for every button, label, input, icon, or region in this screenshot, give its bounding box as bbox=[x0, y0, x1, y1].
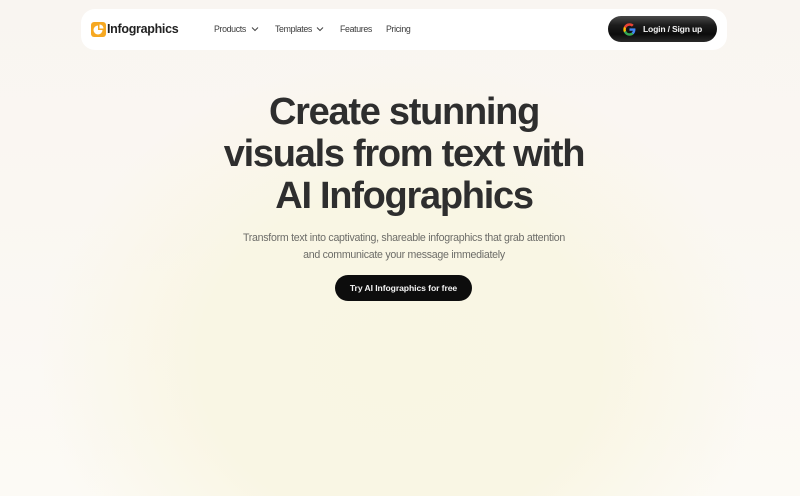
navigation bar bbox=[81, 9, 727, 50]
logo wordmark: Infographics bbox=[107, 22, 178, 36]
button label: Login / Sign up bbox=[643, 24, 702, 34]
call to action button bbox=[335, 275, 472, 301]
hero heading: Create stunning bbox=[269, 91, 539, 133]
nav link: features: Features bbox=[340, 24, 372, 34]
hero heading: visuals from text with bbox=[224, 133, 584, 175]
nav link: pricing: Pricing bbox=[386, 24, 410, 34]
icon: logo bbox=[91, 22, 106, 37]
nav panel bbox=[81, 9, 727, 50]
subtitle line 2: and communicate your message immediately bbox=[303, 249, 505, 261]
icon: chevron products bbox=[252, 27, 258, 32]
icon: chevron templates bbox=[316, 27, 324, 32]
hero subtitle bbox=[243, 232, 565, 261]
subtitle line 1: Transform text into captivating, shareable infographics that grab attention bbox=[243, 232, 565, 244]
nav link: products: Products bbox=[214, 24, 246, 34]
hero heading: AI Infographics bbox=[275, 175, 533, 217]
call to action button: Try AI Infographics for free bbox=[350, 283, 457, 293]
icon: google bbox=[623, 23, 636, 36]
hero heading bbox=[224, 91, 584, 217]
login button bbox=[608, 16, 717, 42]
nav link: templates: Templates bbox=[275, 24, 312, 34]
